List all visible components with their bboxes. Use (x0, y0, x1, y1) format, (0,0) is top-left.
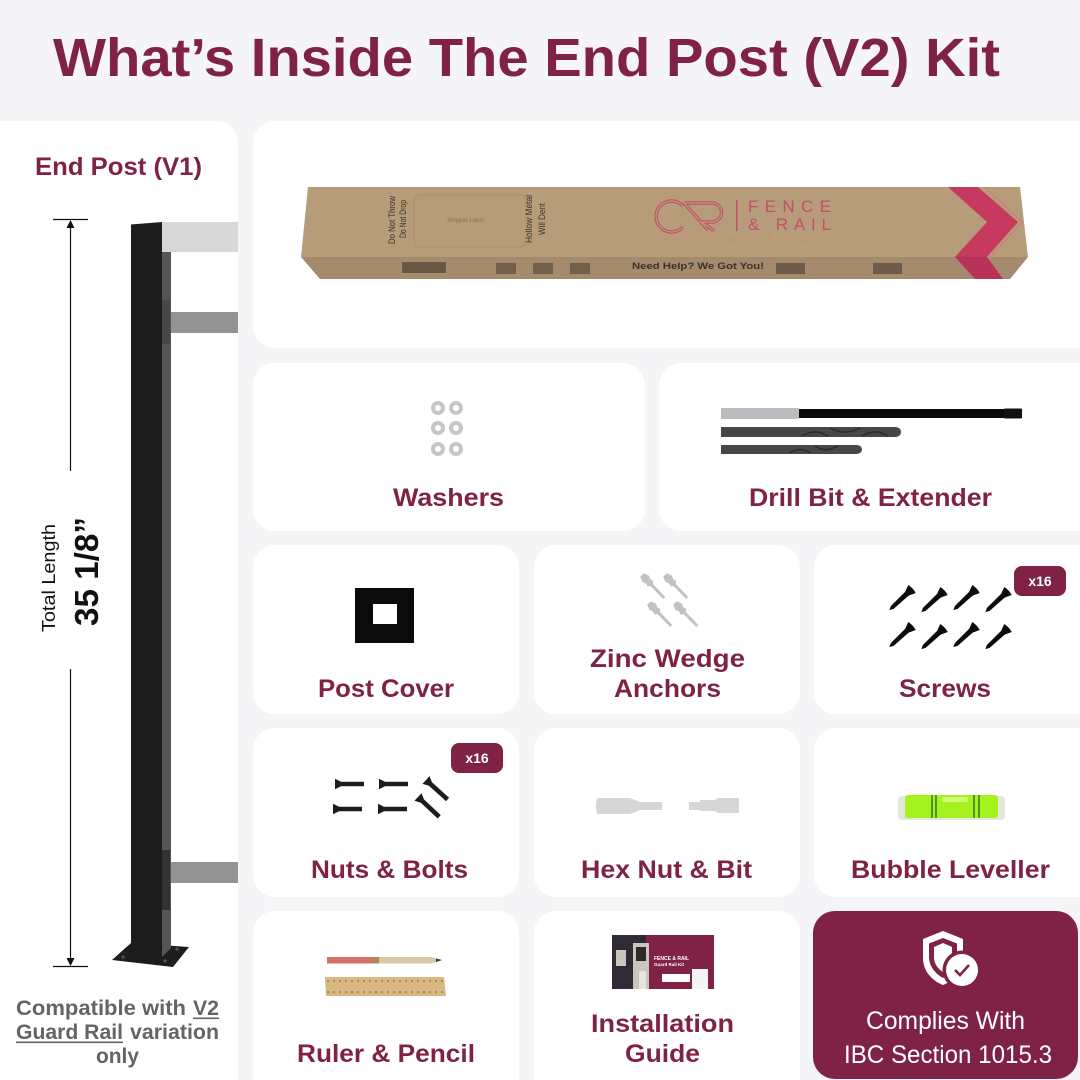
badge: x16: x16 (1028, 573, 1052, 589)
badge: x16 (451, 743, 503, 773)
dimension label (39, 517, 105, 632)
label: zinc wedge anchors (590, 645, 745, 703)
label: zinc wedge anchors: Zinc Wedge (590, 645, 745, 673)
badge: x16 (1014, 566, 1066, 596)
dimension arrow: total length (53, 220, 88, 966)
illustration: cardboard box: SAFETY MADE EASY (651, 235, 829, 245)
label: installation guide (591, 1010, 734, 1068)
dimension label: 35 1/8” (68, 517, 105, 626)
icon: ruler and pencil (325, 957, 446, 996)
panel: hex nut and bit (534, 728, 800, 897)
title: What’s Inside The End Post (V2) Kit (53, 28, 1000, 88)
compatibility note: only (96, 1045, 139, 1068)
illustration: post with rails (112, 222, 238, 967)
icon: bubble level (898, 795, 1005, 820)
illustration: cardboard box (301, 187, 1028, 279)
icon: installation guide booklet (612, 935, 714, 989)
compatibility note (16, 997, 219, 1068)
panel: shipping box (253, 121, 1080, 348)
label: nuts and bolts: Nuts & Bolts (311, 856, 468, 884)
label: bubble leveller: Bubble Leveller (851, 856, 1050, 884)
text: compliance: Complies With (866, 1007, 1025, 1035)
panel: washers (253, 363, 645, 531)
icon: screws (886, 584, 1012, 653)
icon: hex nut and bit (596, 798, 739, 814)
illustration: cardboard box: Shipper Label (447, 218, 484, 224)
panel: bubble leveller (814, 728, 1080, 897)
panel: end post (0, 121, 238, 1080)
illustration: cardboard box: Need Help? We Got You! (632, 261, 764, 271)
panel: post cover (253, 545, 519, 714)
dimension label: Total Length (39, 524, 59, 632)
label: screws: Screws (899, 675, 991, 703)
illustration: cardboard box: Hollow Metal (524, 195, 534, 243)
label: ruler and pencil: Ruler & Pencil (297, 1040, 475, 1068)
icon: drill bit and extender (721, 408, 1022, 454)
panel: compliance (813, 911, 1078, 1079)
compatibility note: variation (130, 1021, 219, 1044)
illustration: cardboard box: Do Not Drop (398, 200, 408, 238)
label: post cover: Post Cover (318, 675, 454, 703)
illustration: cardboard box: Will Dent (537, 203, 547, 235)
icon: shield with check (923, 931, 982, 990)
badge: x16: x16 (465, 750, 489, 766)
icon: installation guide booklet: Guard Rail Kit (654, 962, 685, 967)
icon: installation guide booklet: FENCE & RAIL (654, 956, 689, 962)
illustration: cardboard box: Do Not Throw (387, 196, 397, 244)
label: hex nut and bit: Hex Nut & Bit (581, 856, 753, 884)
compatibility note: Compatible with (16, 997, 186, 1020)
icon: post cover (355, 588, 414, 643)
label: installation guide: Installation (591, 1010, 734, 1038)
icon: nuts and bolts (333, 776, 451, 821)
panel: drill bit and extender (659, 363, 1080, 531)
heading: end post: End Post (V1) (35, 153, 202, 181)
icon: anchors (639, 572, 700, 629)
panel: nuts and bolts (253, 728, 519, 897)
text: compliance: IBC Section 1015.3 (844, 1041, 1052, 1069)
panel: zinc wedge anchors (534, 545, 800, 714)
label: installation guide: Guide (625, 1040, 700, 1068)
panel: ruler and pencil (253, 911, 519, 1080)
illustration: cardboard box: FENCE (748, 197, 831, 216)
compatibility note: V2 (193, 997, 219, 1020)
panel: installation guide (534, 911, 800, 1080)
label: washers: Washers (393, 484, 504, 512)
panel: screws (814, 545, 1080, 714)
compatibility note: Guard Rail (16, 1021, 123, 1044)
icon: washers (433, 403, 461, 454)
label: zinc wedge anchors: Anchors (614, 675, 721, 703)
illustration: cardboard box: & RAIL (748, 215, 831, 234)
label: drill bit and extender: Drill Bit & Extender (749, 484, 992, 512)
text: compliance (844, 1007, 1052, 1069)
